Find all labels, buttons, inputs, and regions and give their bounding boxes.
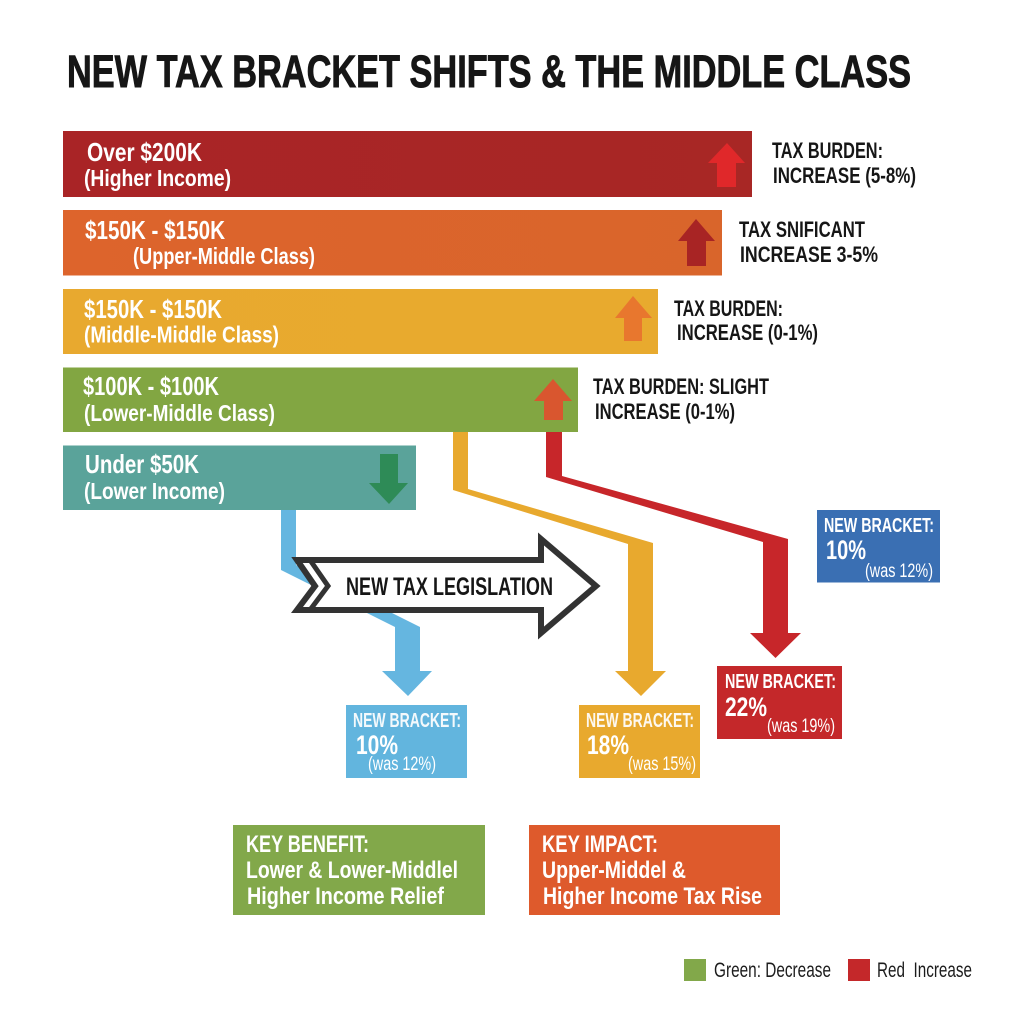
- panel: key impact: KEY IMPACT:: [542, 831, 658, 858]
- bar: middle-middle: [63, 289, 658, 354]
- bar label: under 50K: [84, 449, 225, 504]
- icon: up arrow red-orange: [534, 379, 572, 420]
- arrow label: NEW TAX LEGISLATION: [346, 573, 553, 601]
- panel: key benefit: [233, 825, 485, 915]
- bar label: middle-middle: (Middle-Middle Class): [84, 322, 279, 348]
- icon: down arrow green: [369, 454, 408, 504]
- bar label: under 50K: (Lower Income): [84, 478, 225, 504]
- text: tax burden over 200K: [772, 138, 916, 188]
- box: new bracket 10 percent light blue: [346, 705, 467, 778]
- icon: up arrow red: [708, 143, 745, 187]
- legend: red swatch: [848, 959, 870, 981]
- box: new bracket 22 percent red: [717, 666, 842, 739]
- bar label: upper-middle: (Upper-Middle Class): [133, 243, 315, 269]
- icon: up arrow orange: [615, 296, 652, 341]
- text: tax burden lower-middle: INCREASE (0-1%): [595, 399, 735, 424]
- bar label: lower-middle: $100K - $100K: [83, 371, 219, 401]
- bar label: middle-middle: [84, 294, 279, 348]
- bar label: under 50K: Under $50K: [85, 449, 199, 479]
- box: new bracket 18 percent yellow: [579, 705, 700, 778]
- panel: key benefit: Lower & Lower-Middlel: [246, 857, 458, 884]
- text: tax burden upper-middle: TAX SNIFICANT: [739, 217, 865, 242]
- box: new bracket 10 percent light blue: NEW BRACKET:: [353, 710, 461, 732]
- text: tax burden lower-middle: [593, 374, 769, 424]
- legend: [684, 959, 972, 982]
- text: tax burden middle-middle: INCREASE (0-1%): [677, 320, 818, 345]
- panel: key impact: Upper-Middel &: [542, 857, 686, 884]
- bar: lower-middle: [63, 368, 578, 432]
- box: new bracket 22 percent red: NEW BRACKET:: [725, 671, 836, 693]
- panel: key impact: Higher Income Tax Rise: [543, 883, 762, 910]
- box: new bracket 10 percent blue: (was 12%): [865, 561, 933, 582]
- bar: upper-middle: [63, 210, 722, 276]
- text: tax burden middle-middle: TAX BURDEN:: [674, 296, 783, 321]
- bar: over 200K: [63, 131, 752, 197]
- connector: red arrow: [546, 432, 801, 658]
- connector: yellow arrow: [453, 432, 666, 696]
- text: tax burden upper-middle: INCREASE 3-5%: [740, 242, 878, 267]
- text: tax burden middle-middle: [674, 296, 818, 345]
- box: new bracket 10 percent blue: 10%: [826, 535, 866, 565]
- box: new bracket 18 percent yellow: (was 15%): [628, 754, 696, 775]
- box: new bracket 18 percent yellow: 18%: [587, 730, 629, 760]
- text: tax burden over 200K: TAX BURDEN:: [772, 138, 883, 163]
- box: new bracket 10 percent blue: [817, 510, 940, 582]
- panel: key benefit: KEY BENEFIT:: [246, 831, 369, 858]
- bar: under 50K: [63, 446, 416, 510]
- connector: blue arrow: [281, 510, 432, 696]
- box: new bracket 22 percent red: 22%: [725, 692, 767, 722]
- box: new bracket 10 percent light blue: 10%: [356, 730, 398, 760]
- legend: green label: Green: Decrease: [714, 959, 831, 982]
- bar label: upper-middle: $150K - $150K: [85, 215, 225, 245]
- box: new bracket 10 percent light blue: (was 12%): [368, 754, 436, 775]
- bar label: upper-middle: [85, 215, 315, 269]
- arrow: new tax legislation: [297, 539, 596, 633]
- bar label: over 200K: Over $200K: [87, 137, 202, 167]
- icon: up arrow dark red: [678, 219, 715, 266]
- bar label: middle-middle: $150K - $150K: [84, 294, 222, 324]
- bar label: over 200K: (Higher Income): [84, 165, 231, 191]
- bar label: lower-middle: [83, 371, 275, 426]
- legend: red label: Red Increase: [877, 959, 972, 982]
- text: tax burden over 200K: INCREASE (5-8%): [773, 163, 916, 188]
- box: new bracket 10 percent blue: NEW BRACKET:: [824, 515, 934, 537]
- box: new bracket 18 percent yellow: NEW BRACKET:: [586, 710, 694, 732]
- bar label: lower-middle: (Lower-Middle Class): [84, 400, 275, 426]
- box: new bracket 22 percent red: (was 19%): [767, 716, 835, 737]
- legend: green swatch: [684, 959, 706, 981]
- panel: key benefit: Higher Income Relief: [247, 883, 445, 910]
- panel: key impact: [529, 825, 780, 915]
- bar label: over 200K: [84, 137, 231, 191]
- text: tax burden upper-middle: [739, 217, 878, 267]
- text: tax burden lower-middle: TAX BURDEN: SLIGHT: [593, 374, 769, 399]
